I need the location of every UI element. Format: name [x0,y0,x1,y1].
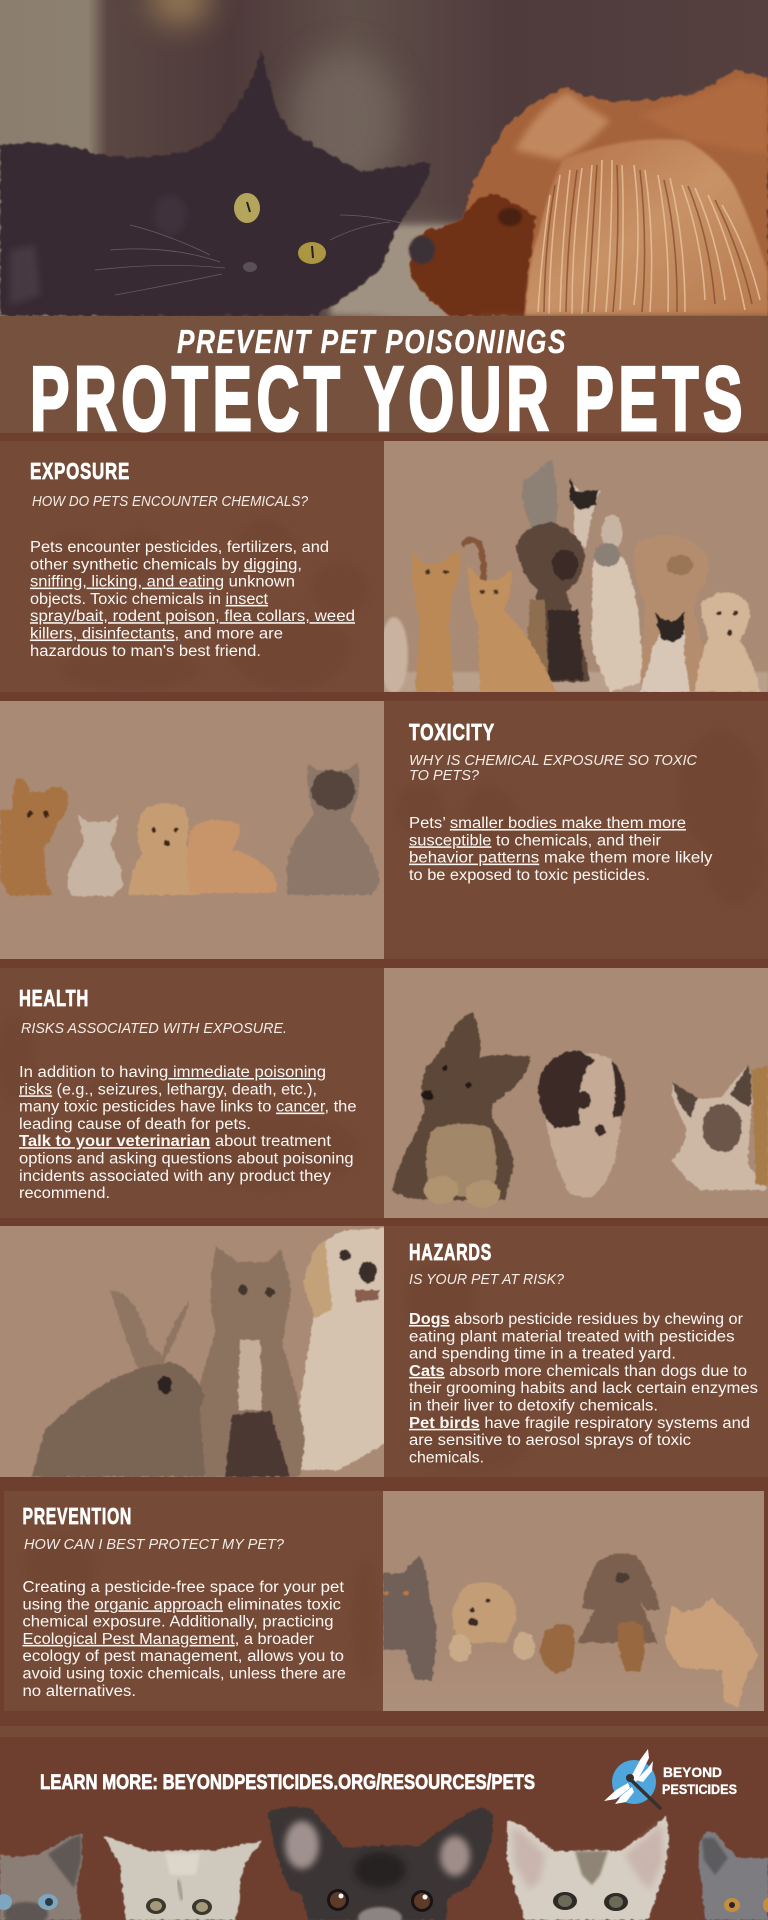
golden puppy [452,1582,516,1643]
shepherd puppy [516,522,590,682]
white tabby kitten [507,1816,669,1920]
body text: prevention: chemical exposure. Additionally, practicing [22,1614,334,1631]
logo wordmark [662,1764,737,1797]
body text: toxicity [409,815,713,884]
body text: health: risks (e.g., seizures, lethargy, death, etc.), [19,1081,317,1098]
body text: hazards: in their liver to detoxify chemicals. [409,1398,658,1414]
body text: health: In addition to having immediate poisoning [19,1064,326,1081]
title: prevent pet poisonings: PREVENT PET POISONINGS [177,323,567,360]
decorative footer band [0,1726,768,1737]
body text: health [19,1064,356,1202]
body text: exposure: hazardous to man's best friend. [30,643,261,660]
body text: exposure: objects. Toxic chemicals in insect [30,591,269,608]
subheading: hazards: IS YOUR PET AT RISK? [409,1271,565,1288]
french bulldog [268,1807,493,1920]
shepherd puppy [392,1012,530,1200]
black cat [0,50,431,316]
siamese kitten [672,1065,768,1190]
subheading: exposure: HOW DO PETS ENCOUNTER CHEMICALS? [32,493,309,510]
panel: hazards photo of rabbit, kitten and puppy [0,1226,390,1477]
panel: exposure text [0,441,384,692]
body text: toxicity: Pets’ smaller bodies make them more [409,815,686,832]
body text: hazards: Cats absorb more chemicals than dogs due to [409,1363,747,1380]
body text: toxicity: behavior patterns make them more likely [409,850,713,867]
panel: hazards text [384,1226,768,1477]
spaniel [407,69,768,316]
panel: exposure photo of cats and dogs [380,441,768,693]
body text: toxicity: susceptible to chemicals, and their [409,832,661,849]
body text: exposure: sniffing, licking, and eating unknown [30,574,295,591]
row of peeking cats and dog [0,1807,768,1920]
panel: health photo of puppies and kitten [384,968,768,1218]
body text: prevention: Creating a pesticide-free space for your pet [22,1579,345,1596]
dog nose [409,236,435,264]
body text: exposure: other synthetic chemicals by digging, [30,556,302,573]
subheading: toxicity [409,752,697,784]
body text: health: incidents associated with any product they [19,1168,331,1185]
body text: health: many toxic pesticides have links to cancer, the [19,1099,356,1116]
cat eyes [234,193,326,264]
body text: health: recommend. [19,1185,110,1202]
black and white kitten [640,630,690,692]
body text: health: options and asking questions about poisoning [19,1150,354,1168]
spaniel puppy [545,1052,621,1198]
pale puppy [695,592,760,692]
cat tails and grey kitten [462,540,484,590]
logo: beyond pesticides [604,1749,737,1808]
body text: exposure: Pets encounter pesticides, fertilizers, and [30,539,329,556]
body text: hazards: are sensitive to aerosol sprays of toxic [409,1432,691,1449]
orange cat [665,1598,758,1708]
heading: prevention: PREVENTION [22,1503,132,1529]
body text: hazards: Pet birds have fragile respiratory systems and [409,1415,750,1432]
body text: hazards: eating plant material treated with pesticides [409,1328,735,1345]
body text: prevention: avoid using toxic chemicals, unless there are [22,1666,346,1682]
heading: toxicity: TOXICITY [409,719,495,745]
panel: toxicity text [384,701,768,959]
icon: blue circle with dragonfly [604,1749,660,1808]
subheading: toxicity: WHY IS CHEMICAL EXPOSURE SO TOXIC [409,752,697,769]
body text: prevention [22,1579,346,1700]
cream tabby cat [104,1836,262,1920]
subheading: toxicity: TO PETS? [409,767,480,784]
grey cat [698,1831,768,1920]
body text: hazards: chemicals. [409,1449,484,1466]
subheading: health: RISKS ASSOCIATED WITH EXPOSURE. [21,1020,287,1037]
siamese cat [0,1834,82,1920]
white cat [590,556,643,692]
body text: exposure [30,539,355,660]
body text: exposure: spray/bait, rodent poison, flea collars, weed [30,608,355,625]
body text: toxicity: to be exposed to toxic pesticides. [409,867,650,884]
heading: exposure: EXPOSURE [30,458,130,484]
hero photo: black cat and spaniel [0,0,768,316]
title band [0,316,768,433]
abyssinian cats [412,548,460,692]
body text: health: leading cause of death for pets. [19,1116,251,1133]
body text: prevention: no alternatives. [22,1683,136,1700]
body text: health: Talk to your veterinarian about treatment [19,1133,332,1150]
panel: health text [0,968,384,1218]
body text: prevention: using the organic approach eliminates toxic [22,1596,341,1613]
logo wordmark: PESTICIDES [662,1781,737,1797]
body text: prevention: Ecological Pest Management , a broader [22,1631,314,1648]
body text: hazards: Dogs absorb pesticide residues by chewing or [409,1311,743,1328]
body text: prevention: ecology of pest management, allows you to [22,1648,344,1665]
learn more link text: LEARN MORE: BEYONDPESTICIDES.ORG/RESOURCES/PETS [40,1771,535,1794]
panel: prevention photo of pets peeking over a ledge [383,1491,764,1711]
grey persian [383,1555,436,1680]
logo wordmark: BEYOND [663,1764,722,1780]
body text: hazards: and spending time in a treated yard. [409,1346,676,1363]
panel: prevention text [4,1491,383,1711]
body text: exposure: killers, disinfectants, and more are [30,626,283,642]
tan puppy [634,535,710,692]
body text: hazards [409,1311,758,1466]
body text: hazards: their grooming habits and lack certain enzymes [409,1380,758,1397]
weimaraner [577,1553,660,1643]
heading: health: HEALTH [19,985,89,1011]
panel: toxicity photo of cats and dogs [0,701,384,959]
subheading: prevention: HOW CAN I BEST PROTECT MY PET? [24,1536,285,1553]
heading: hazards: HAZARDS [409,1239,492,1265]
